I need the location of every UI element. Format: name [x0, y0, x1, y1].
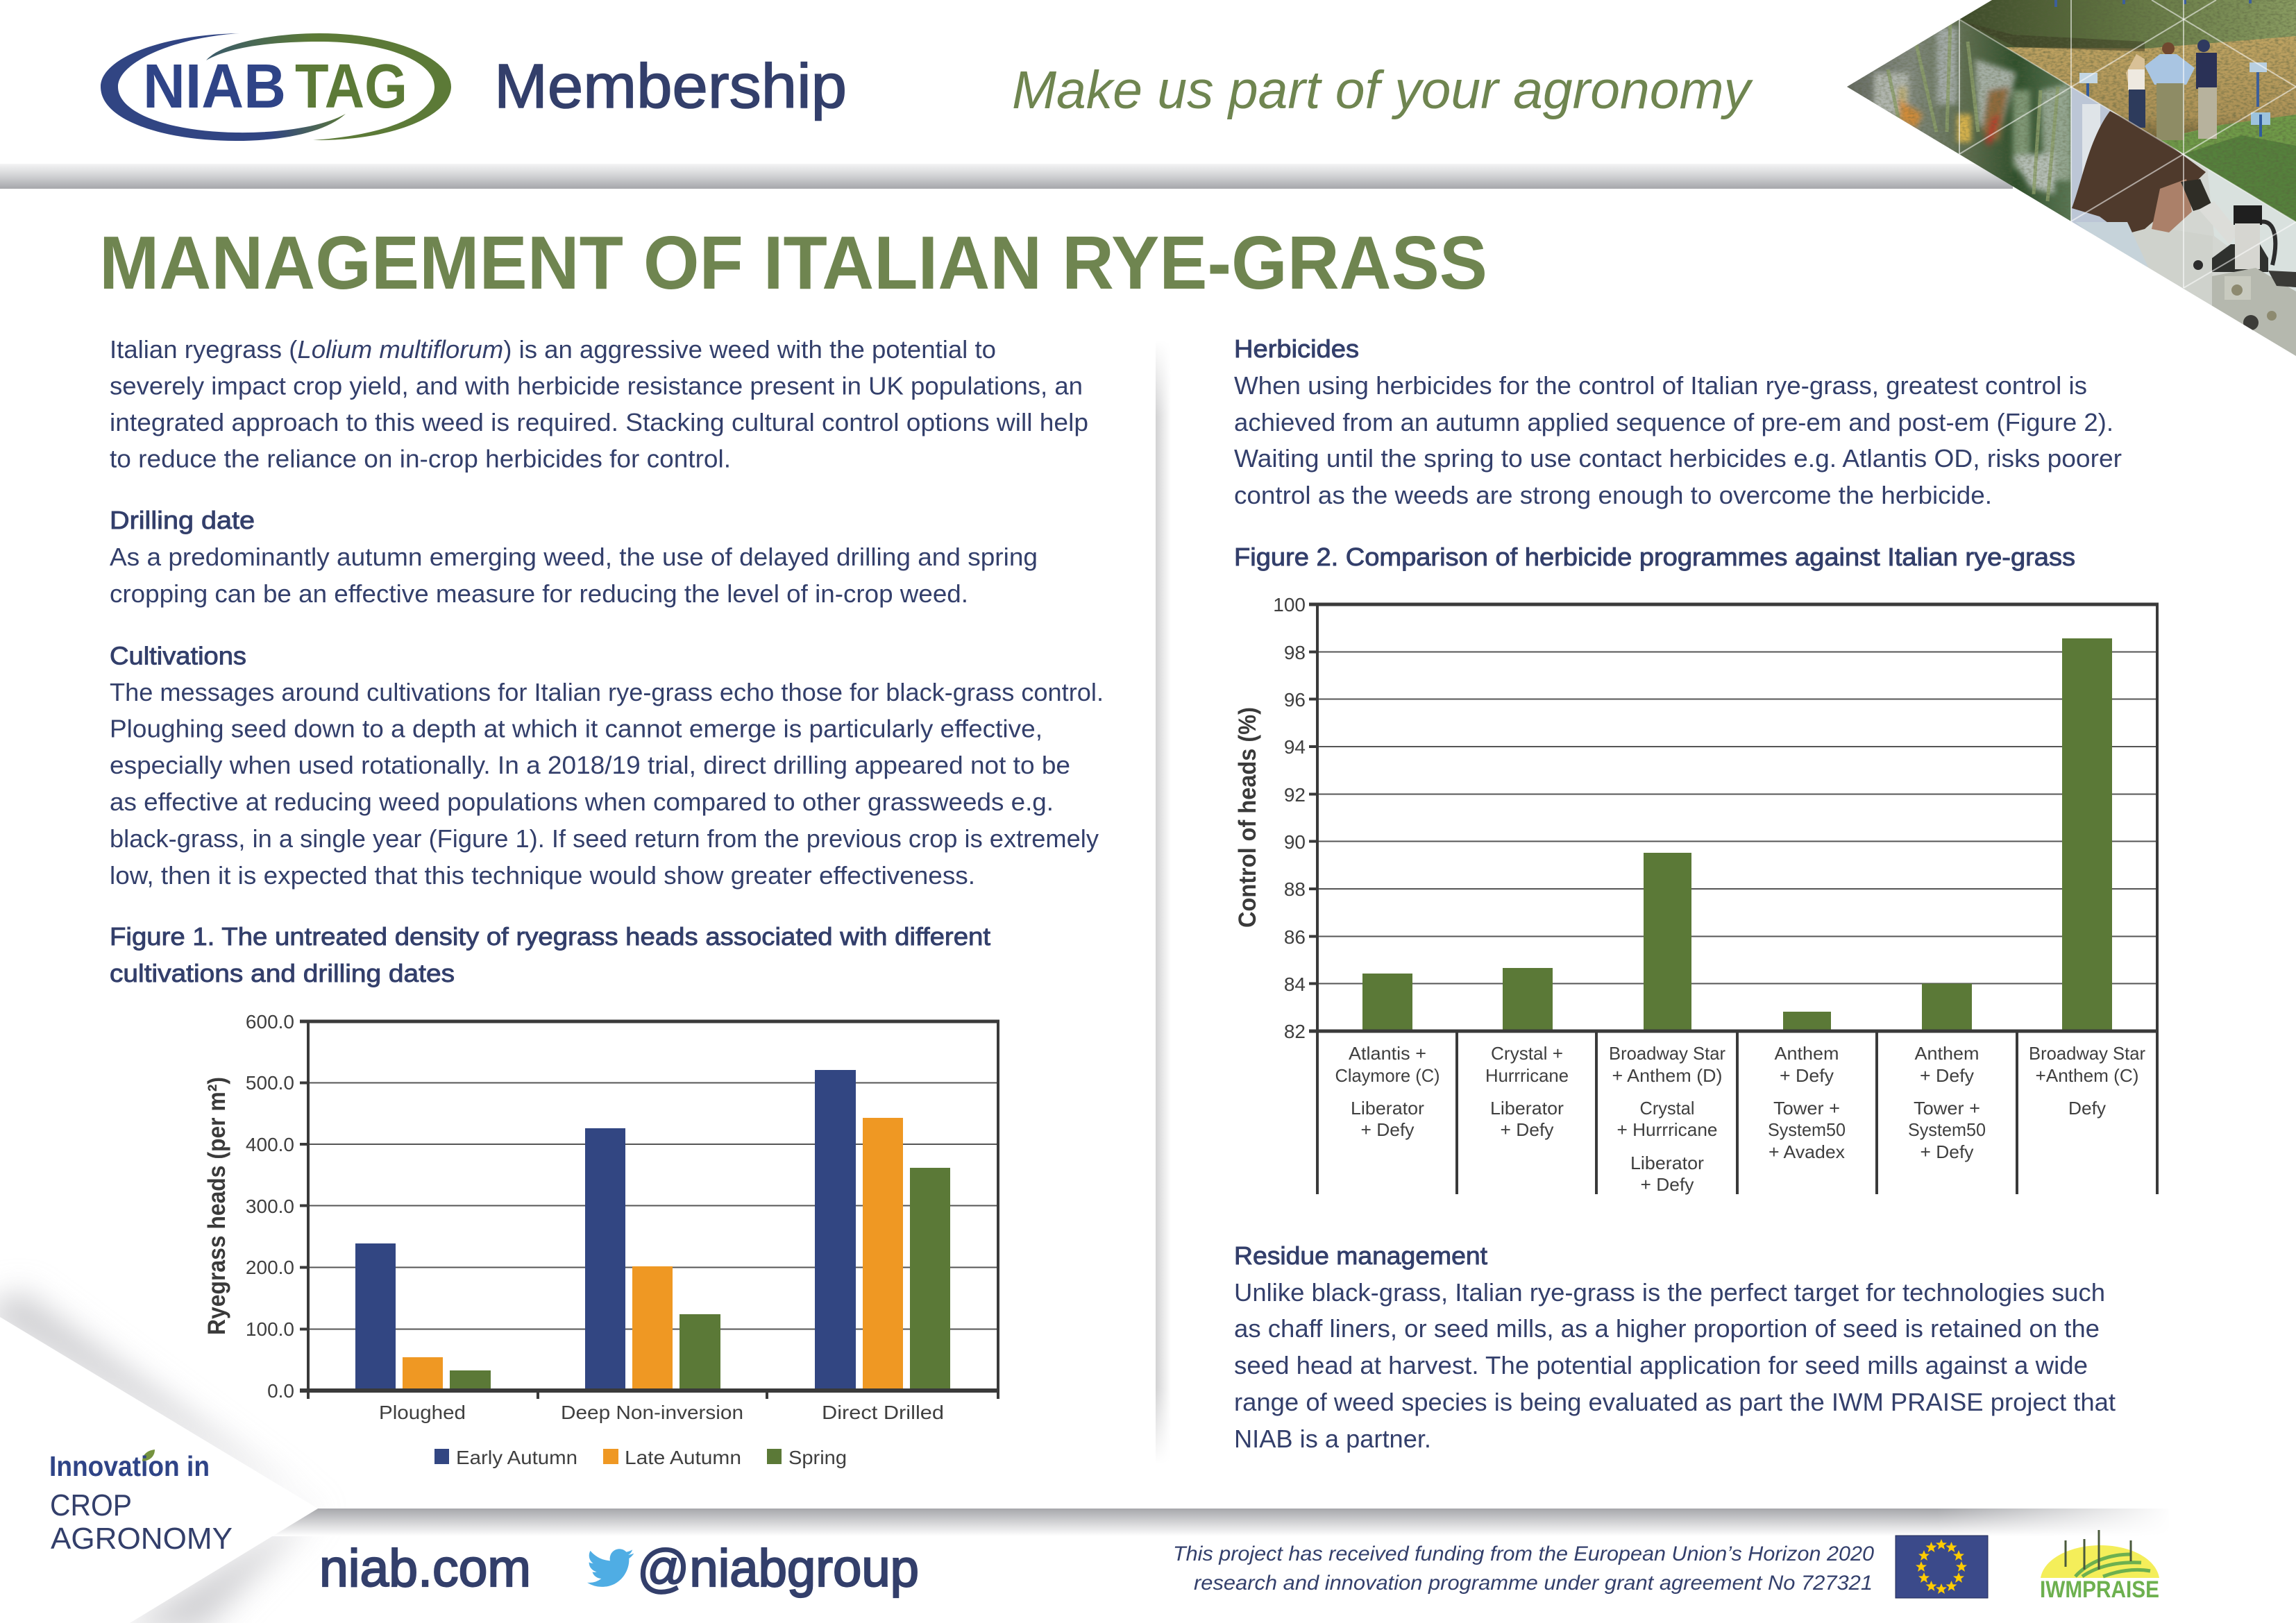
logo: NIAB TAG [101, 33, 451, 141]
programme labels: column 3: Broadway Star [1609, 1043, 1725, 1064]
programme labels: column 5: Anthem [1914, 1043, 1980, 1064]
corner chevron panel [0, 1317, 318, 1623]
lattice lines [1959, 0, 2296, 288]
text block: residue management: seed head at harvest. The potential application for seed mills against a wide [1234, 1351, 2088, 1379]
programme labels: column 3: Liberator [1630, 1153, 1704, 1173]
text block: herbicides: When using herbicides for the control of Italian rye-grass, greatest control is [1234, 371, 2087, 400]
bar chart: figure 2 [1234, 594, 2159, 1195]
programme labels: column 1: Liberator [1351, 1098, 1424, 1119]
logo wordmark TAG: TAG [295, 52, 407, 121]
text block: cultivations: low, then it is expected that this technique would show greater effectiveness. [110, 861, 975, 890]
text block: herbicides: control as the weeds are strong enough to overcome the herbicide. [1234, 481, 1992, 509]
legend: Late Autumn [625, 1447, 741, 1468]
programme labels: column 3 [1609, 1043, 1725, 1195]
programme labels: column 6 [2029, 1043, 2145, 1119]
y-axis labels [1273, 594, 1306, 1042]
y-axis labels: 100 [1273, 594, 1306, 615]
programme labels: column 6: Broadway Star [2029, 1043, 2145, 1064]
programme labels: column 1: Claymore (C) [1335, 1065, 1440, 1086]
legend: Early Autumn [456, 1447, 577, 1468]
heading: figure 1 caption: Figure 1. The untreated density of ryegrass heads associated with different [110, 922, 990, 951]
badge: innovation in crop agronomy: CROP [50, 1488, 132, 1522]
y-axis labels: 84 [1284, 974, 1306, 995]
subheading: drilling date: Drilling date [110, 506, 255, 534]
bars: ploughed [355, 1243, 491, 1391]
text block: cultivations: especially when used rotationally. In a 2018/19 trial, direct drilling appeared not to be [110, 751, 1070, 779]
y-axis labels: 400.0 [246, 1134, 294, 1155]
bar chart: figure 1 [203, 1011, 999, 1468]
heading: figure 2 caption: Figure 2. Comparison of herbicide programmes against Italian rye-grass [1234, 543, 2075, 571]
text block: residue management [1234, 1241, 2116, 1453]
chart frame and column dividers [1309, 604, 2159, 1194]
title: MANAGEMENT OF ITALIAN RYE-GRASS [99, 221, 1487, 305]
photo: crop plants in bags [1847, 19, 2071, 221]
header gradient band [0, 164, 2013, 189]
photo: people in wheat field [1957, 0, 2296, 229]
column divider shadow [1156, 340, 1171, 1464]
x-axis labels: Ploughed [379, 1402, 466, 1423]
programme labels: column 2: Crystal + [1491, 1043, 1563, 1064]
website link: niab.com [319, 1539, 531, 1598]
y-axis labels: 88 [1284, 878, 1306, 900]
bars: deep non-inversion [585, 1128, 720, 1391]
y-axis labels: 92 [1284, 784, 1306, 806]
bars [1362, 638, 2112, 1031]
subheading: cultivations: Cultivations [110, 641, 246, 670]
person: woman in navy cap [2196, 40, 2217, 139]
gridlines [308, 1082, 998, 1329]
programme labels: column 4 [1768, 1043, 1846, 1162]
y-axis labels: 0.0 [267, 1380, 294, 1402]
funding statement: research and innovation programme under grant agreement No 727321 [1194, 1572, 1873, 1595]
logo green crescent [206, 33, 451, 140]
x-axis labels: Deep Non-inversion [561, 1402, 743, 1423]
gridlines [1317, 652, 2157, 984]
programme labels: column 3: Crystal [1639, 1098, 1695, 1119]
programme labels: column 1 [1335, 1043, 1440, 1140]
programme labels: column 6: Defy [2068, 1098, 2106, 1119]
x-axis labels [379, 1402, 944, 1423]
programme labels: column 1: Atlantis + [1349, 1043, 1426, 1064]
programme labels: column 2: Liberator [1490, 1098, 1564, 1119]
text block: cultivations [110, 641, 1104, 890]
person: man in blue shirt [2145, 42, 2195, 140]
text block: herbicides [1234, 334, 2122, 509]
programme labels: column 3: + Defy [1641, 1174, 1694, 1195]
text block: drilling date: cropping can be an effective measure for reducing the level of in-crop weed. [110, 579, 968, 608]
text block: cultivations: as effective at reducing weed populations when compared to other grassweeds e.g. [110, 788, 1054, 816]
person: woman with blonde hair [2126, 54, 2145, 128]
programme labels: column 4: + Defy [1780, 1065, 1834, 1086]
y-axis labels: 98 [1284, 642, 1306, 663]
heading: Membership: Membership [494, 52, 847, 121]
text block: cultivations: black-grass, in a single year (Figure 1). If seed return from the previous crop is extremely [110, 824, 1099, 853]
bars: direct drilled [815, 1070, 950, 1391]
icon: twitter bird [587, 1549, 634, 1587]
y-axis title: Ryegrass heads (per m²) [203, 1077, 230, 1335]
text block: introduction: severely impact crop yield, and with herbicide resistance present in UK populations, an [110, 372, 1083, 400]
legend [434, 1447, 847, 1468]
legend: Spring [788, 1447, 847, 1468]
heading: figure 1 caption: cultivations and drilling dates [110, 959, 455, 987]
programme labels: column 2 [1485, 1043, 1569, 1140]
programme labels: column 6: +Anthem (C) [2035, 1065, 2139, 1086]
logo sun dome [2041, 1545, 2159, 1578]
text block: residue management: as chaff liners, or seed mills, as a higher proportion of seed is retained on the [1234, 1314, 2100, 1343]
y-axis labels: 96 [1284, 689, 1306, 711]
x-axis labels: Direct Drilled [822, 1402, 944, 1423]
logo wordmark: IWMPRAISE [2040, 1577, 2159, 1603]
y-axis labels: 94 [1284, 736, 1306, 758]
y-axis labels: 90 [1284, 831, 1306, 853]
text block: introduction: to reduce the reliance on in-crop herbicides for control. [110, 444, 731, 473]
y-axis labels: 100.0 [246, 1318, 294, 1340]
y-axis labels: 300.0 [246, 1196, 294, 1217]
badge: innovation in crop agronomy: AGRONOMY [51, 1522, 233, 1556]
photo montage [1839, 0, 2296, 361]
icon: leaf [142, 1450, 155, 1461]
text block: cultivations: The messages around cultivations for Italian rye-grass echo those for black-grass control. [110, 678, 1104, 706]
corner chevron shadow [0, 1291, 321, 1623]
text block: drilling date: As a predominantly autumn emerging weed, the use of delayed drilling and spring [110, 543, 1038, 571]
icon: EU flag [1896, 1536, 1988, 1598]
text block: residue management: Unlike black-grass, Italian rye-grass is the perfect target for technologies such [1234, 1278, 2105, 1307]
programme labels: column 4: + Avadex [1769, 1141, 1845, 1162]
logo: IWMPRAISE [2040, 1530, 2159, 1603]
logo wordmark NIAB: NIAB [143, 52, 286, 121]
programme labels: column 5: + Defy [1920, 1141, 1974, 1162]
programme labels: column 5 [1908, 1043, 1986, 1162]
programme labels: column 4: Anthem [1774, 1043, 1839, 1064]
text block: herbicides: achieved from an autumn applied sequence of pre-em and post-em (Figure 2). [1234, 408, 2113, 436]
text block: residue management: NIAB is a partner. [1234, 1425, 1431, 1453]
badge: innovation in crop agronomy [49, 1450, 233, 1556]
programme labels: column 3: + Anthem (D) [1612, 1065, 1723, 1086]
programme labels: column 5: Tower + [1914, 1098, 1980, 1119]
footer gradient band [272, 1506, 2172, 1539]
text block: drilling date [110, 506, 1038, 608]
y-axis labels: 86 [1284, 926, 1306, 948]
programme labels: column 4: Tower + [1773, 1098, 1840, 1119]
programme labels: column 5: System50 [1908, 1119, 1986, 1140]
logo plants [2066, 1530, 2131, 1570]
y-axis labels: 82 [1284, 1021, 1306, 1042]
chart frame and ticks [300, 1021, 999, 1399]
text block: introduction: Italian ryegrass (Lolium multiflorum) is an aggressive weed with the potential to [110, 335, 996, 364]
programme labels: column 5: + Defy [1920, 1065, 1974, 1086]
y-axis labels: 500.0 [246, 1072, 294, 1094]
subheading: herbicides: Herbicides [1234, 334, 1359, 363]
logo field rows [2075, 1554, 2150, 1577]
funding statement [1173, 1543, 1874, 1595]
twitter handle: @niabgroup [637, 1539, 919, 1598]
text block: cultivations: Ploughing seed down to a depth at which it cannot emerge is particularly effective, [110, 715, 1043, 742]
text block: residue management: range of weed species is being evaluated as part the IWM PRAISE project that [1234, 1388, 2116, 1416]
subheading: residue management: Residue management [1234, 1241, 1487, 1270]
logo blue crescent [101, 33, 346, 141]
programme labels: column 4: System50 [1768, 1119, 1846, 1140]
photo: scientist at microscope [2068, 83, 2296, 361]
y-axis title: Control of heads (%) [1234, 707, 1261, 928]
y-axis labels: 600.0 [246, 1011, 294, 1033]
text block: introduction: integrated approach to this weed is required. Stacking cultural control options will help [110, 408, 1088, 436]
tagline: Make us part of your agronomy [1012, 60, 1753, 120]
programme labels: column 3: + Hurrricane [1617, 1119, 1717, 1140]
programme labels: column 2: + Defy [1501, 1119, 1553, 1140]
heading: figure 1 caption [110, 922, 990, 987]
badge: innovation in crop agronomy: Innovation in [49, 1450, 210, 1482]
y-axis labels [246, 1011, 294, 1402]
programme labels: column 2: Hurrricane [1485, 1065, 1569, 1086]
y-axis labels: 200.0 [246, 1257, 294, 1278]
text block: introduction [110, 335, 1088, 473]
programme labels: column 1: + Defy [1360, 1119, 1415, 1140]
trial plot signs [2054, 0, 2270, 137]
text block: herbicides: Waiting until the spring to use contact herbicides e.g. Atlantis OD, risks poorer [1234, 444, 2122, 473]
funding statement: This project has received funding from the European Union’s Horizon 2020 [1173, 1543, 1874, 1565]
